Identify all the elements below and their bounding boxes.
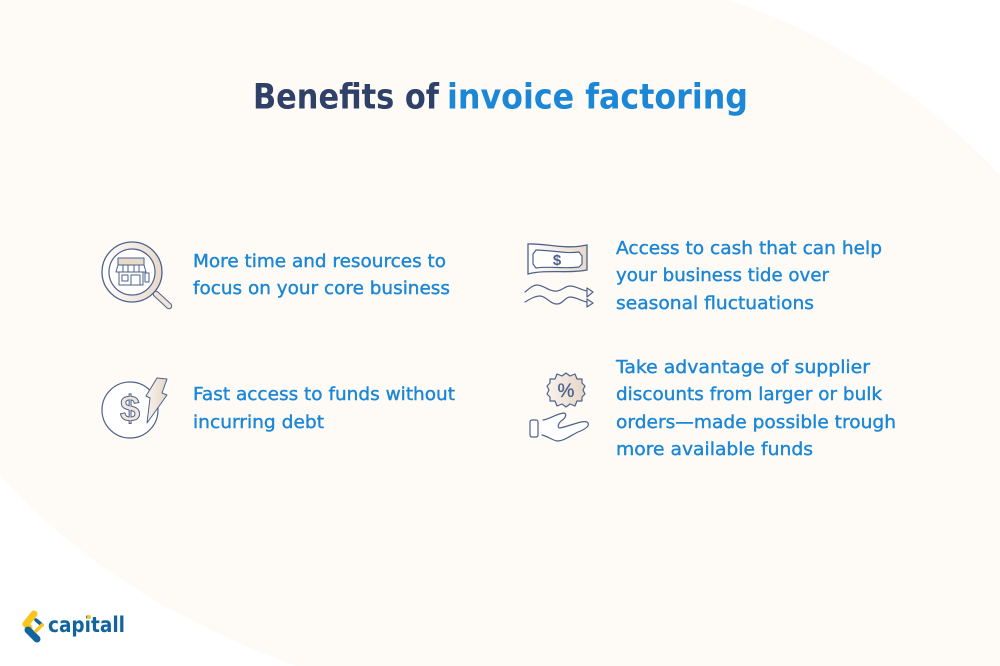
text: cash access: seasonal fluctuations [616,293,814,314]
text: cash access: Access to cash that can help [616,238,882,259]
text: fast access: Fast access to funds without [193,384,455,405]
icon: hand with percent badge: % [558,381,575,402]
benefit: fast access [102,378,455,438]
text: cash access [616,238,882,314]
title [253,78,748,118]
icon: magnifier over storefront [102,242,169,306]
text: core business: focus on your core business [193,278,450,299]
icon: banknote and waves [525,244,593,307]
text: supplier discounts: Take advantage of supplier [615,357,871,378]
text: cash access: your business tide over [616,265,830,286]
icon: dollar coin with lightning [102,378,167,438]
text: core business: More time and resources to [193,251,446,272]
text: supplier discounts: more available funds [616,439,813,460]
text: fast access: incurring debt [193,412,324,433]
icon: hand with percent badge [530,373,588,441]
text: core business [193,251,450,299]
icon: dollar coin with lightning: $ [120,388,140,429]
text: supplier discounts: discounts from larger or bulk [616,384,883,405]
text: supplier discounts: orders—made possible trough [616,412,896,433]
benefit: core business [102,242,450,306]
text: fast access [193,384,455,433]
title: Benefits of [253,78,440,118]
icon: logo mark [26,614,42,639]
icon: banknote and waves: $ [553,252,562,269]
logo: capitall [26,613,125,639]
benefit: cash access [525,238,882,314]
benefit: supplier discounts [530,357,896,460]
wordmark: capitall [48,613,125,637]
text: supplier discounts [615,357,896,460]
title: invoice factoring [447,78,748,118]
